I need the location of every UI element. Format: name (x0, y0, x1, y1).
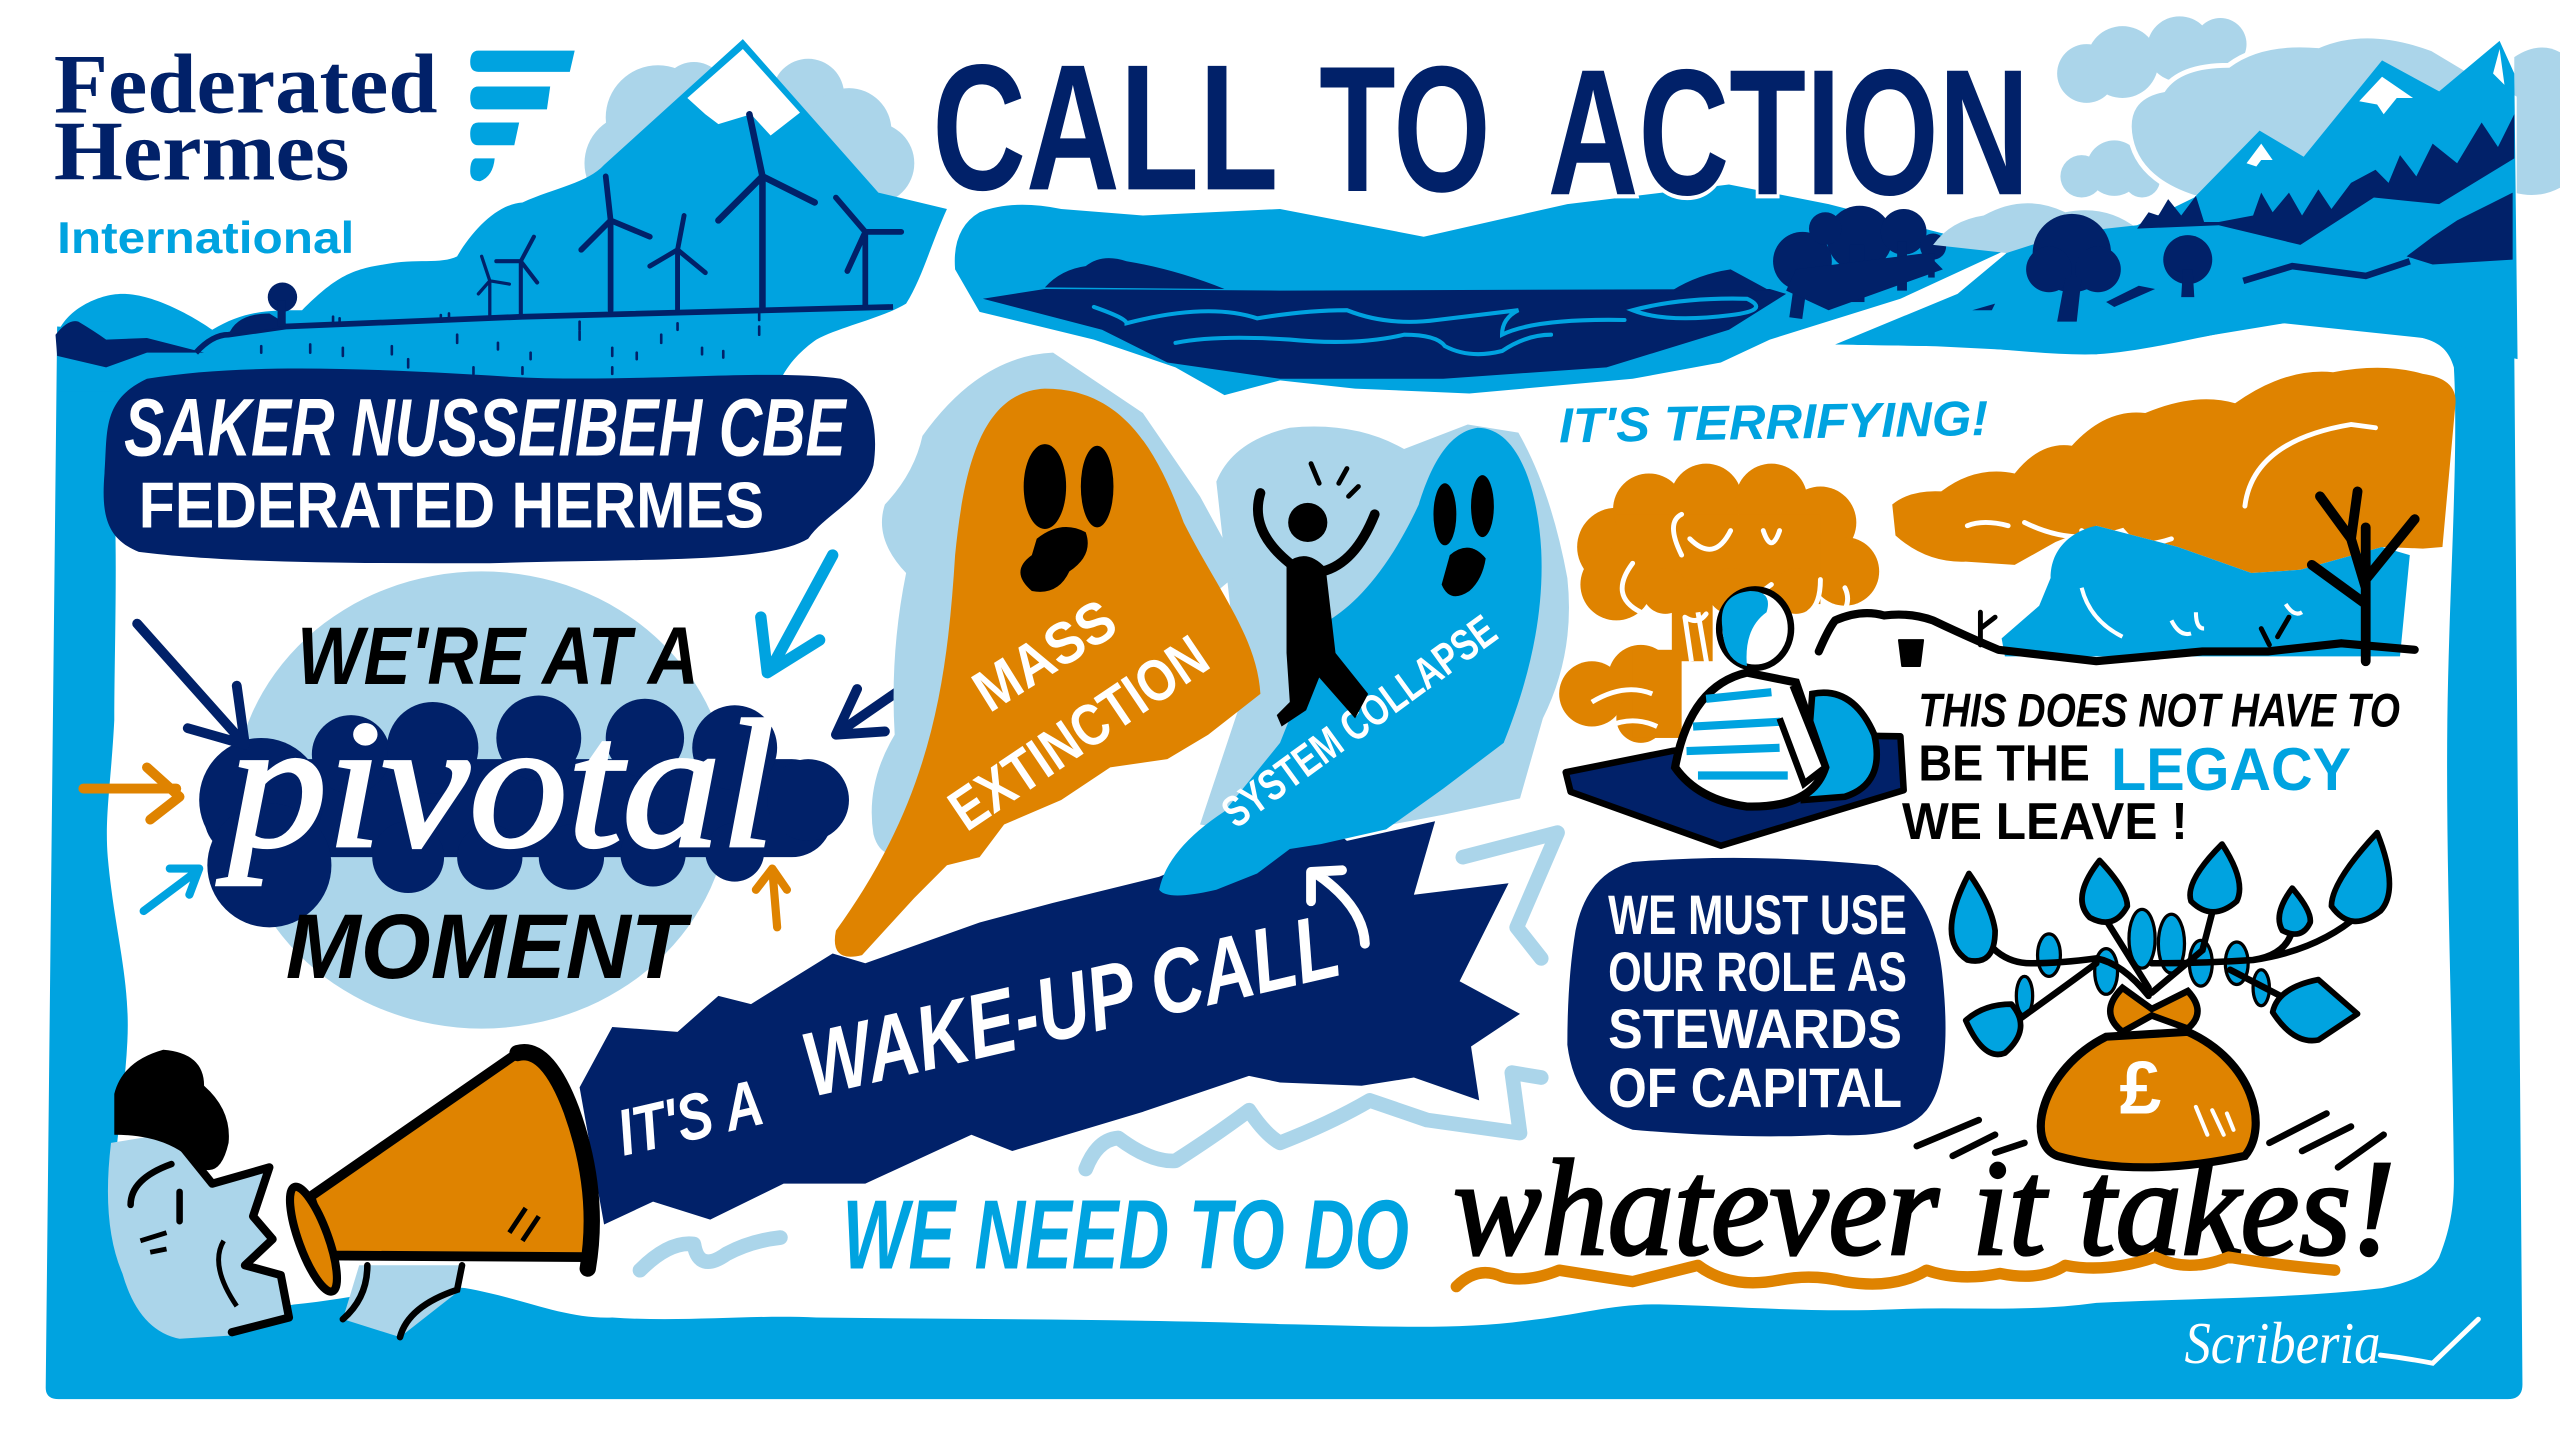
logo: Hermes (54, 105, 349, 199)
blue ghost: system collapse (1159, 428, 1542, 896)
stewards of capital box: STEWARDS (1608, 998, 1902, 1060)
legacy text: LEGACY (2111, 735, 2351, 803)
money bag with growing plant: £ (2120, 1045, 2161, 1129)
scriberia signature: Scriberia (2184, 1311, 2380, 1376)
legacy text: BE THE (1918, 734, 2090, 791)
orange ghost: mass extinction: EXTINCTION (937, 623, 1220, 843)
title: ACTION (1548, 32, 2029, 233)
orange ghost: mass extinction: MASS (962, 587, 1128, 724)
person with megaphone (108, 1050, 592, 1339)
logo: International (57, 214, 354, 263)
title: TO (1319, 29, 1491, 230)
pivotal moment callout (199, 571, 849, 1029)
wake-up call burst banner (580, 811, 1520, 1224)
logo: Federated (54, 38, 438, 132)
stewards of capital box: OF CAPITAL (1608, 1057, 1902, 1119)
orange explosion scene (1559, 368, 2456, 743)
arrows around pivotal (83, 555, 906, 927)
title: CALL (932, 27, 1278, 228)
light blue squiggles (640, 833, 1558, 1270)
speaker name banner (104, 369, 875, 563)
lake landscape (955, 184, 2007, 395)
stewards of capital box: WE MUST USE (1608, 884, 1907, 946)
left landscape with wind turbines (56, 39, 947, 392)
pivotal moment callout: pivotal (217, 683, 776, 886)
orange squiggle (1456, 1257, 2335, 1287)
stewards of capital box: OUR ROLE AS (1608, 941, 1907, 1003)
we need to do text: WE NEED TO DO (842, 1180, 1409, 1290)
legacy text: WE LEAVE ! (1902, 793, 2188, 851)
pivotal moment callout: MOMENT (286, 896, 693, 998)
wake-up call burst banner: IT'S A (610, 1065, 770, 1170)
whatever it takes text: whatever it takes! (1453, 1132, 2395, 1284)
title (932, 27, 2029, 233)
speaker name banner: SAKER NUSSEIBEH CBE (124, 383, 848, 474)
pivotal moment callout: WE'RE AT A (297, 611, 699, 702)
running stick figure (1258, 464, 1375, 727)
legacy text (1902, 685, 2400, 851)
ghost halo backgrounds (872, 353, 1569, 855)
scorched ground and dead trees (1819, 491, 2415, 666)
seated person (1675, 589, 1877, 807)
stewards of capital box (1567, 858, 1946, 1136)
right landscape with clouds and mountains (1835, 16, 2560, 359)
legacy text: THIS DOES NOT HAVE TO (1918, 685, 2400, 738)
money bag with growing plant (1917, 833, 2389, 1167)
blue ghost: system collapse: SYSTEM COLLAPSE (1213, 606, 1506, 837)
orange ghost: mass extinction (835, 389, 1260, 957)
terrifying text: IT'S TERRIFYING! (1558, 392, 1989, 453)
wake-up call burst banner: WAKE-UP CALL (793, 894, 1349, 1117)
speaker name banner: FEDERATED HERMES (139, 468, 764, 541)
navy mat (1566, 735, 1904, 846)
logo (54, 38, 575, 263)
